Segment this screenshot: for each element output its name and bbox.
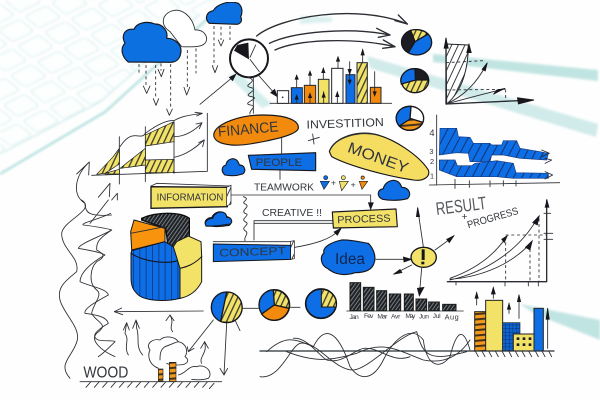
baseline axis xyxy=(260,349,475,353)
background: blurred pens xyxy=(228,16,600,340)
icon: large blue cloud xyxy=(122,22,181,62)
label: investition: INVESTITION xyxy=(306,116,384,132)
plus sign xyxy=(308,134,319,144)
background: blurred keyboard xyxy=(0,0,215,174)
label: progress: PROGRESS xyxy=(466,206,520,231)
icon: small blue cloud xyxy=(205,212,232,226)
monthly bar chart: Aug xyxy=(445,312,459,321)
rising smoke arrows xyxy=(123,315,208,363)
tree xyxy=(148,337,210,382)
label: creative: CREATIVE !! xyxy=(262,208,322,219)
people banner: PEOPLE xyxy=(256,157,303,169)
3d pie chart xyxy=(131,213,202,300)
curved arrow to process xyxy=(295,228,341,247)
pie chart: blue and yellow xyxy=(211,292,242,323)
curve line chart xyxy=(447,200,553,286)
monthly bar chart: Fev xyxy=(364,313,374,320)
money blob: MONEY xyxy=(345,139,411,177)
people icons: + xyxy=(331,178,336,188)
arrow to bars xyxy=(258,75,277,97)
pie chart: mostly blue xyxy=(306,289,336,318)
upper-right sketches xyxy=(257,14,560,188)
information box xyxy=(151,183,231,208)
stair area chart xyxy=(92,112,207,184)
squiggly lines xyxy=(59,200,115,378)
pie chart gauge with spring xyxy=(230,39,268,114)
information to process connector xyxy=(231,195,373,209)
monthly bar chart xyxy=(347,283,463,321)
process box: PROCESS xyxy=(337,213,391,226)
pie connector xyxy=(243,306,300,310)
connector lines xyxy=(280,137,282,179)
waves xyxy=(260,332,470,377)
pie chart 1 xyxy=(402,30,432,55)
arrows from pie xyxy=(187,320,240,375)
people icons: + xyxy=(351,179,356,189)
blue stepped area chart: 3 xyxy=(429,147,433,156)
vector growth chart xyxy=(444,38,534,104)
process box xyxy=(332,209,397,228)
pie chart 2 xyxy=(401,69,429,93)
blue stepped area chart: 4 xyxy=(429,128,435,138)
arrow to left xyxy=(114,308,203,315)
idea cloud: Idea xyxy=(335,251,365,268)
monthly bar chart: Jul xyxy=(433,313,441,320)
arrow to gauge xyxy=(200,74,236,104)
monthly bar chart: May xyxy=(405,313,416,320)
blue stepped area chart: 1 xyxy=(430,171,434,180)
rain from clouds xyxy=(139,26,230,115)
city bar chart buildings xyxy=(474,287,554,357)
icon: white cloud xyxy=(163,10,207,47)
pie chart: three segments xyxy=(259,290,290,320)
finance blob: FINANCE xyxy=(217,119,279,141)
monthly bar chart: Jun xyxy=(419,313,429,320)
arrows at left of chart xyxy=(76,162,117,203)
idea cloud xyxy=(321,240,375,275)
monthly bar chart: Avr xyxy=(391,313,401,320)
icon: small blue cloud xyxy=(206,2,242,24)
bar chart top center xyxy=(270,49,392,103)
blue stepped area chart xyxy=(429,115,560,188)
label: wood: WOOD xyxy=(83,365,128,382)
icon: small blue cloud left xyxy=(222,159,245,176)
ground with ticks xyxy=(80,382,222,389)
icon: blue cloud right xyxy=(378,180,410,200)
monthly bar chart: Jan xyxy=(349,314,359,321)
lower-left sketches xyxy=(59,200,300,389)
spring connector xyxy=(243,197,247,241)
central concept diagram xyxy=(205,137,410,262)
arrows to pie charts xyxy=(257,14,407,50)
finance blob xyxy=(214,115,298,145)
blue stepped area chart: 2 xyxy=(430,157,434,166)
people icons xyxy=(320,176,368,191)
idea arrow xyxy=(376,257,412,262)
exclamation node xyxy=(411,247,436,267)
concept to process connector xyxy=(254,221,332,240)
concept box xyxy=(213,241,294,262)
label: teamwork: TEAMWORK xyxy=(254,182,315,193)
people banner xyxy=(248,153,316,171)
node arrows xyxy=(393,207,454,296)
lower-right sketches xyxy=(260,193,554,377)
pie chart 3 xyxy=(396,106,424,130)
plus sign: + xyxy=(462,212,468,223)
money blob xyxy=(329,133,429,180)
upper-left sketches xyxy=(76,2,298,203)
information box: INFORMATION xyxy=(157,192,223,203)
icon: small blue cloud middle xyxy=(205,212,231,227)
monthly bar chart: Mar xyxy=(377,313,388,320)
label: result: RESULT xyxy=(435,193,487,219)
concept box: CONCEPT xyxy=(219,245,286,260)
